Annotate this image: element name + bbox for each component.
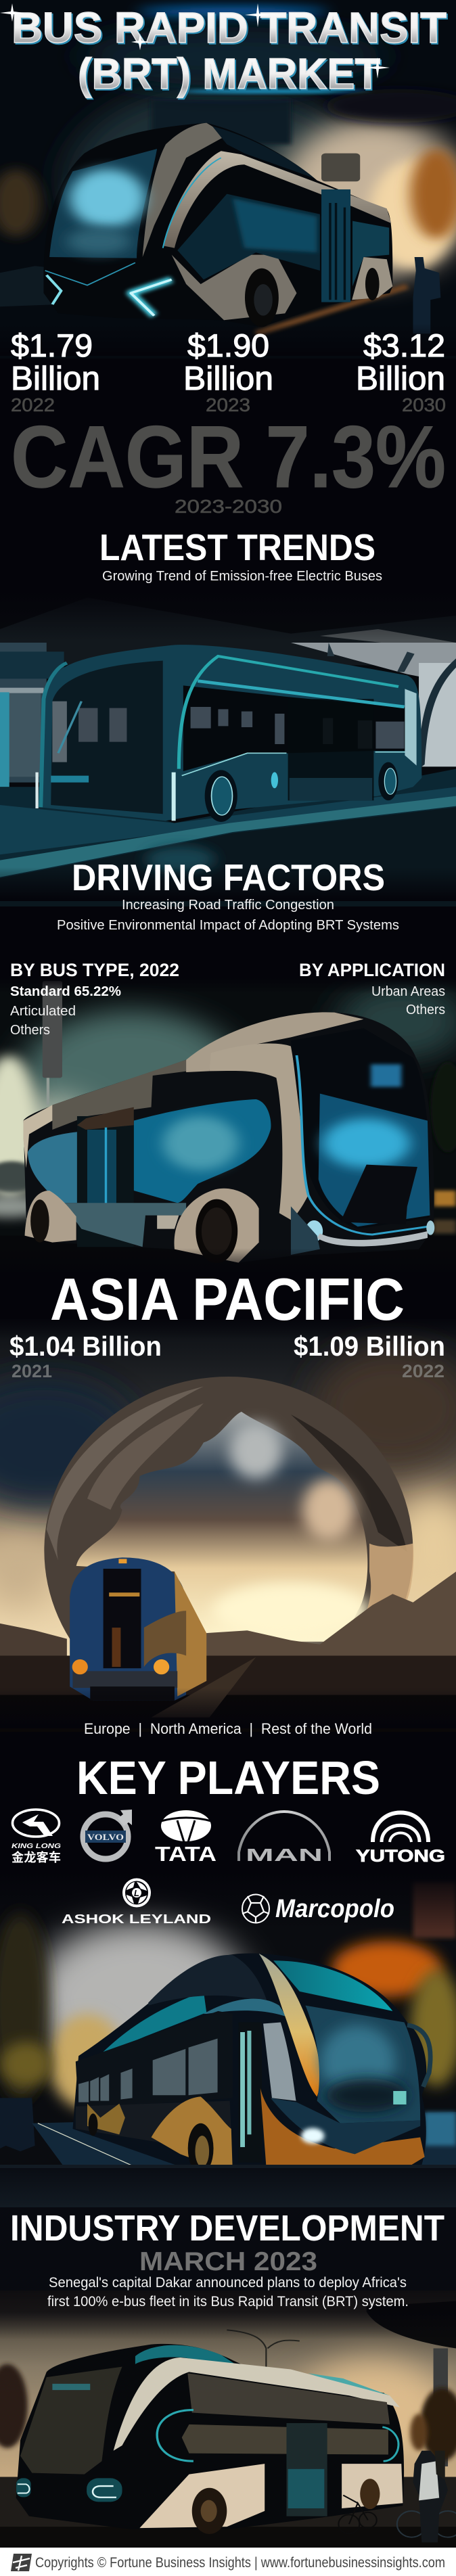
stat: 2030 market size: 2030	[402, 394, 446, 415]
illustration: bus and broken planet landscape	[0, 1319, 456, 1762]
pedestrians	[0, 2098, 35, 2151]
lower gold body	[76, 2101, 233, 2165]
cream roof and pillar	[186, 1012, 363, 1072]
footer logo	[11, 2554, 32, 2571]
scene fade	[0, 978, 456, 1279]
stat: 2030 market size: $3.12	[363, 327, 445, 363]
stat: 2030 market size: Billion	[356, 361, 445, 397]
footer copyright bar	[0, 2548, 456, 2576]
stat: 2022 market size: Billion	[11, 361, 100, 397]
illustration: futuristic bus at night	[0, 0, 456, 361]
region value 2021: $1.04 Billion	[9, 1331, 162, 1362]
road	[32, 2112, 456, 2190]
trees	[0, 2364, 28, 2448]
illustration: cream bus with blue windows	[0, 981, 456, 1263]
heading: latest trends: LATEST TRENDS	[99, 526, 375, 568]
stop sign	[321, 154, 360, 181]
logo: Tata: TATA	[155, 1842, 216, 1866]
wheels	[196, 1199, 237, 1263]
other regions: Europe | North America | Rest of the World	[84, 1720, 372, 1737]
windshield	[292, 1057, 300, 1120]
heading: industry development	[10, 2208, 444, 2309]
logo: Tata	[155, 1810, 216, 1866]
lower cream fenders	[174, 1189, 259, 1263]
gold arc pillar	[259, 1954, 320, 2096]
heading: latest trends: Growing Trend of Emission-free Electric Buses	[102, 569, 382, 584]
planet	[44, 1377, 413, 1724]
scene fade	[0, 1854, 456, 1930]
scene fade	[0, 1316, 456, 1728]
logo: Ashok Leyland: ASHOK LEYLAND	[62, 1912, 211, 1926]
door	[288, 699, 373, 800]
logo: Volvo: VOLVO	[87, 1832, 124, 1842]
front bumper	[260, 2088, 425, 2185]
side windows	[76, 2011, 233, 2109]
region value 2021	[9, 1331, 162, 1381]
title line 2: (BRT) MARKET	[78, 49, 380, 98]
bus	[70, 1557, 186, 1701]
platform and road	[0, 768, 456, 878]
road light streak	[256, 286, 407, 334]
segment: by application: Urban Areas	[371, 984, 445, 999]
headlight	[307, 1220, 323, 1241]
person	[413, 257, 440, 334]
heading: latest trends	[99, 526, 382, 584]
heading: driving factors: Increasing Road Traffic Congestion	[122, 898, 334, 913]
side windows	[183, 685, 407, 771]
stat: 2022 market size: 2022	[11, 394, 55, 415]
bus headlights	[47, 275, 172, 316]
title line 1: BUS RAPID TRANSIT	[12, 3, 447, 52]
bus body	[72, 1953, 426, 2185]
region value 2022	[294, 1331, 445, 1381]
logo: Ashok Leyland	[62, 1878, 211, 1926]
logo: Yutong	[356, 1813, 445, 1866]
side door	[239, 2022, 262, 2163]
tree right	[410, 149, 456, 239]
stat: 2023 market size	[183, 327, 273, 415]
mountains	[0, 1624, 67, 1659]
right tree and lights	[430, 1062, 456, 1152]
stat: 2022 market size	[11, 327, 100, 415]
stat: 2022 market size: $1.79	[11, 327, 93, 363]
segment: by bus type: Standard 65.22%	[10, 984, 121, 999]
teal light strips	[179, 656, 398, 769]
illustration: orange and teal city bus	[0, 1854, 456, 2190]
sign post	[43, 981, 62, 1078]
side cyan trim	[163, 158, 221, 248]
segment: by bus type: BY BUS TYPE, 2022	[10, 960, 179, 980]
left wall	[0, 643, 47, 783]
side windows	[177, 194, 320, 279]
front glass	[51, 661, 163, 814]
segment: by bus type: Articulated	[10, 1004, 76, 1019]
planet opening	[76, 1412, 367, 1642]
heading: driving factors	[57, 856, 399, 933]
bicycle	[338, 2496, 456, 2537]
lamp post	[227, 2330, 300, 2369]
front wheel	[205, 770, 237, 822]
stat: 2023 market size: Billion	[183, 361, 273, 397]
seats	[62, 1203, 186, 1247]
wheels	[192, 2488, 227, 2534]
upper side glass	[187, 2373, 390, 2424]
sparkles	[0, 3, 390, 78]
people	[413, 2451, 448, 2542]
windshield	[305, 2006, 420, 2123]
heading: industry development: Senegal's capital Dakar announced plans to deploy Africa's	[49, 2275, 407, 2291]
region heading: Asia Pacific: ASIA PACIFIC	[50, 1266, 405, 1333]
mirror	[407, 2025, 430, 2087]
heading: industry development: first 100% e-bus fleet in its Bus Rapid Transit (BRT) system.	[47, 2294, 409, 2309]
door	[286, 2423, 327, 2516]
bus body	[16, 2344, 404, 2529]
canopy	[291, 643, 456, 678]
wheels	[245, 269, 279, 327]
region value 2022: $1.09 Billion	[294, 1331, 445, 1362]
road	[152, 1657, 256, 1718]
region value 2022: 2022	[402, 1361, 444, 1381]
headlight	[301, 2128, 324, 2144]
cream band	[114, 2358, 400, 2451]
logo: MAN	[239, 1812, 329, 1865]
road	[0, 1236, 456, 1297]
stat: 2030 market size	[356, 327, 446, 415]
car left	[0, 267, 51, 306]
windshield	[20, 2367, 122, 2475]
title	[0, 3, 447, 98]
scene fade	[0, 323, 456, 356]
segment: by application: BY APPLICATION	[299, 960, 445, 980]
CAGR figure: 2023-2030	[175, 496, 282, 517]
logo: King Long: KING LONG	[12, 1843, 61, 1850]
windshield	[49, 149, 157, 258]
stat: 2023 market size: $1.90	[187, 327, 269, 363]
stat: 2023 market size: 2023	[206, 394, 250, 415]
segment: by bus type: Others	[10, 1023, 50, 1038]
lower cream panels	[139, 2464, 265, 2528]
illustration: cream and teal bus at sunset	[0, 2165, 456, 2550]
ground	[0, 2477, 456, 2550]
bus body	[39, 645, 421, 821]
scene fade	[0, 2168, 456, 2339]
rear wheel	[378, 762, 398, 800]
logo: Yutong: YUTONG	[356, 1847, 445, 1866]
tree left	[0, 169, 41, 237]
heading: industry development: MARCH 2023	[139, 2247, 317, 2276]
segment: by application	[299, 960, 445, 1017]
bus body	[23, 1012, 434, 1223]
lower side glass	[182, 2424, 388, 2455]
overpass	[367, 2301, 456, 2348]
door	[77, 1116, 134, 1247]
right trees	[332, 1941, 442, 1997]
wheel	[188, 2123, 214, 2174]
logo: Marcopolo: Marcopolo	[275, 1895, 394, 1923]
logo: MAN: MAN	[246, 1845, 323, 1865]
heading: driving factors: Positive Environmental Impact of Adopting BRT Systems	[57, 918, 399, 933]
illustration: teal electric bus at station	[0, 609, 456, 906]
rear panel	[405, 689, 417, 766]
heading: driving factors: DRIVING FACTORS	[72, 856, 385, 898]
tree top right	[325, 89, 456, 123]
cyan trims	[157, 2410, 193, 2461]
headlights	[87, 2478, 122, 2502]
heading: key players: KEY PLAYERS	[76, 1751, 380, 1804]
logo: King Long: 金龙客车	[12, 1850, 61, 1864]
region value 2021: 2021	[12, 1361, 52, 1381]
scene fade	[0, 587, 456, 901]
logo: Ashok Leyland: L	[134, 1888, 139, 1898]
roof teal	[99, 1992, 206, 2056]
ground	[0, 1656, 456, 1703]
left tree	[0, 1910, 49, 2101]
bus silhouette	[43, 123, 392, 327]
bumper band	[317, 1231, 428, 1246]
logo: Volvo	[83, 1810, 132, 1859]
logo: King Long	[12, 1810, 61, 1864]
side windows	[134, 1099, 271, 1203]
segment: by bus type	[10, 960, 179, 1038]
segment: by application: Others	[406, 1003, 445, 1017]
upper side panels	[52, 1060, 187, 1130]
